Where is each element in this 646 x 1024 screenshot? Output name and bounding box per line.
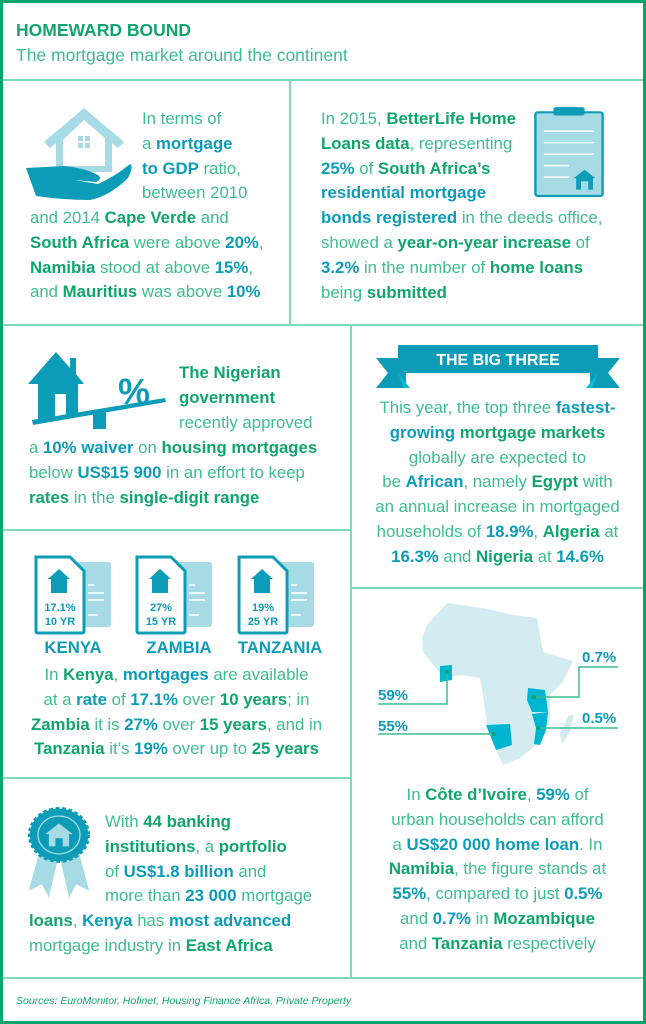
text: Nigerian waiver: The Nigerian xyxy=(179,363,281,382)
text: mortgage to GDP: between 2010 xyxy=(142,183,247,202)
subtitle: The mortgage market around the continent xyxy=(16,45,348,65)
icon: hand holding house xyxy=(26,108,132,200)
icons: three mortgage documents: 10 YR xyxy=(45,616,75,628)
text: a 10% waiver on housing mortgages xyxy=(29,438,317,457)
text: mortgage industry in East Africa xyxy=(29,936,273,955)
text: big three: households of 18.9%, Algeria at xyxy=(377,522,618,541)
text: BetterLife: bonds registered in the deeds office, xyxy=(321,208,602,227)
text: BetterLife xyxy=(321,109,602,302)
text: affordability: and Tanzania respectively xyxy=(399,934,596,953)
title: HOMEWARD BOUND xyxy=(16,20,191,40)
icons: three mortgage documents: 27% xyxy=(150,602,172,614)
text: Nigerian waiver xyxy=(179,363,312,432)
text: Nigerian waiver: government xyxy=(179,388,275,407)
map: Africa with highlighted countries: 0.7% xyxy=(582,649,616,666)
map: Africa with highlighted countries xyxy=(378,603,618,765)
text: East African rates xyxy=(31,665,322,758)
icon: award rosette xyxy=(28,807,90,898)
text: ZAMBIA xyxy=(146,638,212,657)
text: mortgage to GDP: to GDP ratio, xyxy=(142,159,241,178)
text: rates in the single-digit range xyxy=(29,488,259,507)
text: affordability xyxy=(389,785,606,953)
icons: three mortgage documents xyxy=(34,556,314,634)
icons: three mortgage documents: 25 YR xyxy=(248,616,278,628)
text: South Africa were above 20%, xyxy=(30,233,264,252)
text: big three: globally are expected to xyxy=(409,448,586,467)
text: affordability: and 0.7% in Mozambique xyxy=(400,909,595,928)
text: and 2014 Cape Verde and xyxy=(30,208,229,227)
text: big three: 16.3% and Nigeria at 14.6% xyxy=(391,547,604,566)
text: affordability: In Côte d’Ivoire, 59% of xyxy=(407,785,588,804)
map: Africa with highlighted countries: 59% xyxy=(378,687,408,704)
text: loans, Kenya has most advanced xyxy=(29,911,291,930)
icon: house on seesaw with percent: % xyxy=(118,371,150,412)
text: BetterLife: showed a year-on-year increase of xyxy=(321,233,590,252)
text: Kenya banking xyxy=(105,812,312,905)
text: affordability: 55%, compared to just 0.5% xyxy=(393,884,602,903)
text: below US$15 900 in an effort to keep xyxy=(29,463,305,482)
text: East African rates: Tanzania it’s 19% over up to 25 years xyxy=(34,739,319,758)
icons: three mortgage documents: 19% xyxy=(252,602,274,614)
text: East African rates: In Kenya, mortgages are available xyxy=(44,665,308,684)
text: Nigerian waiver: recently approved xyxy=(179,413,312,432)
map: Africa with highlighted countries: 0.5% xyxy=(582,710,616,727)
text: East African rates: Zambia it is 27% over 15 years, and in xyxy=(31,715,322,734)
text: BetterLife: Loans data, representing xyxy=(321,134,512,153)
icons: three mortgage documents: 17.1% xyxy=(44,602,76,614)
icons: three mortgage documents: 15 YR xyxy=(146,616,176,628)
icon: clipboard xyxy=(534,107,604,197)
text: big three: be African, namely Egypt with xyxy=(382,472,613,491)
text: big three: growing mortgage markets xyxy=(390,423,605,442)
labels: countries: KENYA xyxy=(44,638,102,657)
text: and Mauritius was above 10% xyxy=(30,282,260,301)
text: mortgage to GDP: In terms of xyxy=(142,109,221,128)
text: BetterLife: 25% of South Africa’s xyxy=(321,159,490,178)
text: BetterLife: In 2015, BetterLife Home xyxy=(321,109,516,128)
text: big three: an annual increase in mortgaged xyxy=(375,497,620,516)
text: Namibia stood at above 15%, xyxy=(30,258,253,277)
text: big three: This year, the top three fastest- xyxy=(380,398,616,417)
text: Kenya banking: institutions, a portfolio xyxy=(105,837,287,856)
text: affordability: a US$20 000 home loan. In xyxy=(393,835,602,854)
text: TANZANIA xyxy=(238,638,322,657)
text: Kenya banking: of US$1.8 billion and xyxy=(105,862,266,881)
text: big three xyxy=(375,398,620,566)
banner: the big three xyxy=(376,345,620,388)
text: BetterLife: residential mortgage xyxy=(321,183,486,202)
text: mortgage to GDP xyxy=(142,109,247,202)
map: Africa with highlighted countries: 55% xyxy=(378,718,408,735)
text: Kenya banking: more than 23 000 mortgage xyxy=(105,886,312,905)
text: BetterLife: 3.2% in the number of home loans xyxy=(321,258,583,277)
text: East African rates: at a rate of 17.1% over 10 years; in xyxy=(44,690,309,709)
text: mortgage to GDP: a mortgage xyxy=(142,134,232,153)
text: affordability: urban households can afford xyxy=(391,810,604,829)
sources: Sources: EuroMonitor, Hofinet, Housing Finance Africa, Private Property xyxy=(16,995,351,1007)
icon: house on seesaw with percent xyxy=(28,352,166,429)
text: affordability: Namibia, the figure stands at xyxy=(389,859,606,878)
text: BetterLife: being submitted xyxy=(321,283,447,302)
text: Kenya banking: With 44 banking xyxy=(105,812,231,831)
banner: the big three: THE BIG THREE xyxy=(436,352,560,369)
